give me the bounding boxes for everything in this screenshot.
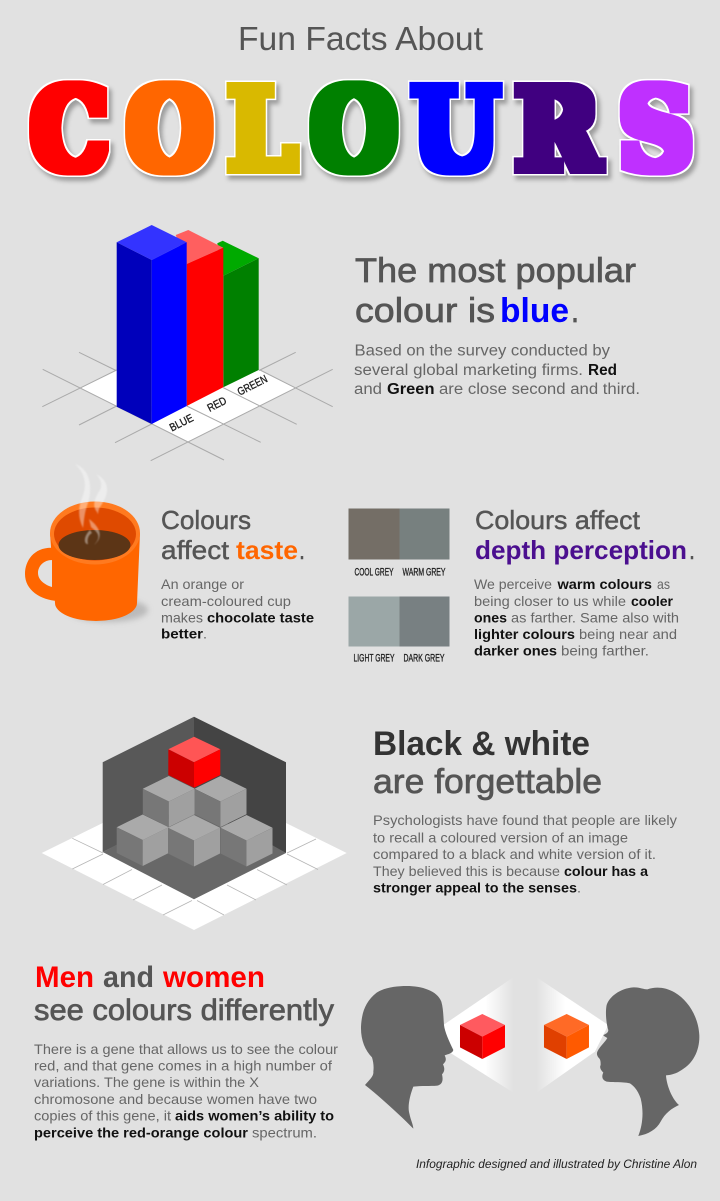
heading: Colours bbox=[161, 505, 251, 535]
title: COLOURS: C bbox=[31, 65, 108, 196]
body: Psychologists have found that people are likely bbox=[373, 812, 677, 828]
title: COLOURS bbox=[31, 65, 693, 196]
bar label: BLUE: BLUE bbox=[168, 412, 195, 434]
body: copies of this gene, it bbox=[34, 1108, 171, 1124]
body: They believed this is because bbox=[373, 863, 560, 879]
body: chromosone and because women have two bbox=[34, 1091, 317, 1107]
body: darker ones bbox=[474, 642, 557, 658]
heading: The most popular bbox=[355, 252, 636, 290]
body: . bbox=[577, 880, 581, 896]
body: ones bbox=[474, 610, 507, 626]
cube: red bbox=[460, 1014, 505, 1059]
illustration: man and woman silhouettes with cubes bbox=[361, 977, 699, 1136]
body: several global marketing firms. bbox=[354, 362, 583, 379]
swatches: depth perception greys bbox=[348, 508, 450, 664]
grey cube: back right bbox=[194, 776, 246, 827]
title: COLOURS: O bbox=[127, 65, 212, 196]
body: being farther. bbox=[561, 642, 649, 658]
body: Red bbox=[588, 362, 617, 379]
body: An orange or bbox=[161, 576, 244, 592]
heading: blue bbox=[500, 292, 569, 330]
grey cube: front left bbox=[117, 814, 169, 866]
body: as bbox=[657, 576, 670, 592]
body: as farther. Same also with bbox=[511, 610, 679, 626]
body: spectrum. bbox=[252, 1124, 317, 1140]
body: to recall a coloured version of an image bbox=[373, 830, 628, 846]
body: warm colours bbox=[556, 576, 652, 592]
text block: black and white bbox=[373, 725, 677, 896]
heading: . bbox=[299, 535, 305, 565]
label: dark grey: DARK GREY bbox=[404, 652, 445, 664]
light beams bbox=[443, 977, 608, 1093]
grey cube: front right bbox=[220, 815, 272, 866]
credit: Infographic designed and illustrated by Christine Alon bbox=[416, 1159, 697, 1171]
bar: blue bbox=[117, 225, 187, 424]
body: lighter colours bbox=[474, 626, 575, 642]
text block: depth perception bbox=[474, 505, 695, 658]
label: warm grey: WARM GREY bbox=[402, 566, 446, 578]
grey cube: back left bbox=[143, 776, 195, 827]
label: light grey: LIGHT GREY bbox=[354, 652, 395, 664]
swatch: dark grey bbox=[400, 596, 450, 646]
label: cool grey: COOL GREY bbox=[354, 566, 394, 578]
heading: affect bbox=[161, 535, 230, 565]
heading: Colours affect bbox=[475, 505, 641, 535]
title: COLOURS: U bbox=[412, 65, 499, 196]
bar label: GREEN: GREEN bbox=[236, 373, 270, 398]
swatch: cool grey bbox=[348, 508, 400, 560]
heading: taste bbox=[236, 535, 298, 565]
body: There is a gene that allows us to see the colour bbox=[34, 1041, 338, 1057]
heading: Men bbox=[35, 961, 94, 994]
title: COLOURS: L bbox=[228, 65, 296, 196]
heading: depth perception bbox=[475, 535, 687, 565]
body: . bbox=[203, 626, 207, 642]
body: and bbox=[354, 381, 382, 398]
body: being near and bbox=[579, 626, 677, 642]
body: variations. The gene is within the X bbox=[34, 1074, 260, 1090]
bar: green bbox=[217, 241, 259, 387]
body: aids women’s ability to bbox=[175, 1108, 334, 1124]
title: COLOURS: S bbox=[619, 65, 693, 196]
body: perceive the red-orange colour bbox=[34, 1124, 249, 1140]
body: We perceive bbox=[474, 576, 552, 592]
body: red, and that gene comes in a high number of bbox=[34, 1058, 332, 1074]
heading: and bbox=[103, 961, 154, 994]
cube: orange bbox=[544, 1014, 589, 1059]
red cube bbox=[168, 737, 220, 788]
chart: isometric bar chart of popular colours bbox=[42, 225, 333, 461]
heading: . bbox=[571, 292, 579, 330]
heading: see colours differently bbox=[34, 994, 334, 1027]
body: compared to a black and white version of it. bbox=[373, 846, 656, 862]
room walls and floor bbox=[103, 717, 194, 852]
text block: taste bbox=[161, 505, 314, 642]
bar label: RED: RED bbox=[206, 395, 229, 415]
heading: women bbox=[162, 961, 265, 994]
title: COLOURS: R bbox=[515, 65, 601, 196]
body: cream-coloured cup bbox=[161, 593, 291, 609]
floor tiles bbox=[42, 823, 347, 930]
swatch: warm grey bbox=[400, 508, 450, 560]
silhouette: woman bbox=[597, 987, 699, 1136]
body: chocolate taste bbox=[207, 610, 314, 626]
body: Green bbox=[387, 381, 434, 398]
body: makes bbox=[161, 610, 203, 626]
body: stronger appeal to the senses bbox=[373, 880, 577, 896]
illustration: isometric room with cubes bbox=[42, 717, 347, 930]
body: colour has a bbox=[564, 863, 648, 879]
text block: men and women bbox=[34, 961, 338, 1140]
heading: are forgettable bbox=[373, 763, 602, 801]
icon: coffee cup bbox=[25, 464, 148, 622]
grey cube: front middle bbox=[168, 815, 220, 866]
heading: colour is bbox=[355, 292, 495, 330]
body: Based on the survey conducted by bbox=[354, 342, 610, 360]
title: Fun Facts About: Fun Facts About bbox=[238, 20, 483, 57]
silhouette: man bbox=[361, 986, 453, 1129]
heading: . bbox=[689, 535, 695, 565]
steam bbox=[75, 464, 107, 545]
body: being closer to us while bbox=[474, 593, 626, 609]
heading: Black & white bbox=[373, 725, 590, 763]
text block: most popular colour bbox=[354, 252, 640, 398]
body: are close second and third. bbox=[439, 381, 640, 398]
body: cooler bbox=[631, 593, 674, 609]
swatch: light grey bbox=[348, 596, 400, 646]
title: COLOURS: O bbox=[311, 65, 397, 196]
bar: red bbox=[176, 230, 223, 406]
body: better bbox=[161, 626, 204, 642]
